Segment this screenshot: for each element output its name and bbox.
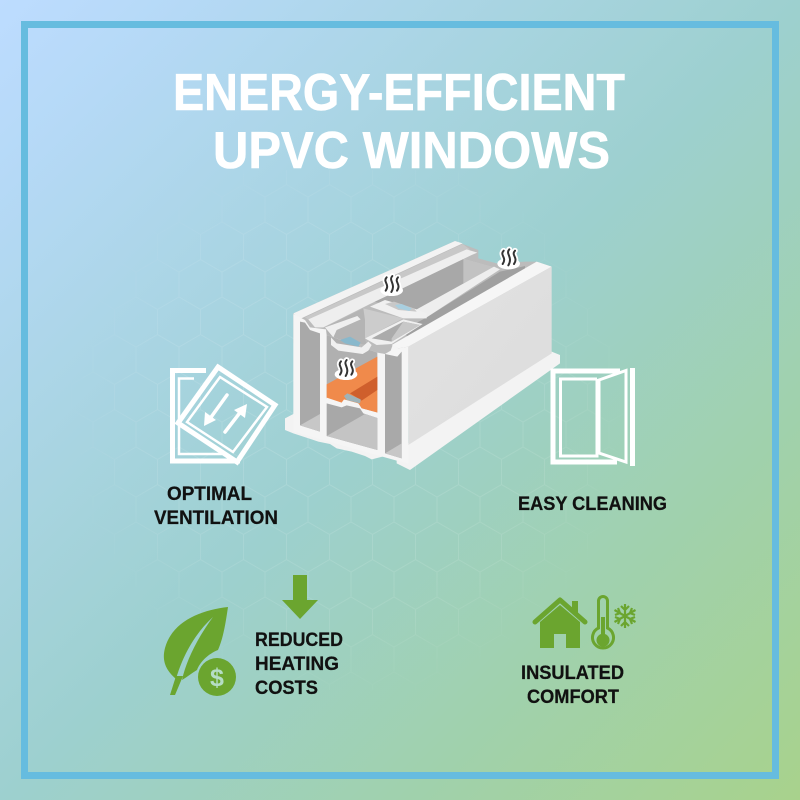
window profile cross-section [285,241,560,470]
back opening [373,258,497,310]
orange thermal layer [327,357,377,413]
center upper chamber [327,335,377,413]
title [173,63,625,179]
upper channel [305,244,470,322]
icon: tilted window ventilation [172,367,275,462]
interior silhouette [293,241,552,363]
icon: leaf with dollar coin: $ [210,664,224,692]
right channel [403,266,525,342]
right chamber [385,352,402,458]
upper gasket [340,337,361,347]
steam icon: chamber [335,360,357,380]
front face [293,314,408,463]
label: optimal ventilation: VENTILATION [154,508,278,529]
sash bar [325,316,361,337]
hexagon pattern [147,217,559,629]
T profile with gasket [370,300,427,318]
icon: down arrow [282,575,318,619]
title: UPVC WINDOWS [213,121,610,179]
sash lip [331,337,372,354]
label: insulated comfort: COMFORT [527,687,619,708]
rail two [417,267,500,317]
label: reduced heating costs: REDUCED [255,630,343,651]
base plate [285,352,560,470]
icon: open window [553,368,632,466]
label: optimal ventilation: OPTIMAL [167,484,252,505]
label: reduced heating costs [255,630,343,699]
left chamber [300,322,320,432]
lower gasket [344,393,361,403]
label: insulated comfort [521,663,624,708]
label: optimal ventilation [154,484,278,529]
right wall top [392,262,552,348]
rail one [308,249,477,327]
icon: leaf with dollar coin [164,607,236,696]
left ridge top [293,241,463,319]
label: easy cleaning: EASY CLEANING [518,494,667,515]
icon: house, thermometer and snowflake [535,596,636,648]
right wall side [408,267,552,445]
steam icon: back [497,249,520,269]
label: reduced heating costs: HEATING [255,654,339,675]
steam icon: middle [380,276,403,296]
center top chamber [325,308,403,345]
box bar [365,319,423,345]
title: ENERGY-EFFICIENT [173,63,625,121]
label: reduced heating costs: COSTS [255,678,318,699]
center lower chamber [327,403,377,450]
mid rail on front [327,398,377,418]
label: insulated comfort: INSULATED [521,663,624,684]
